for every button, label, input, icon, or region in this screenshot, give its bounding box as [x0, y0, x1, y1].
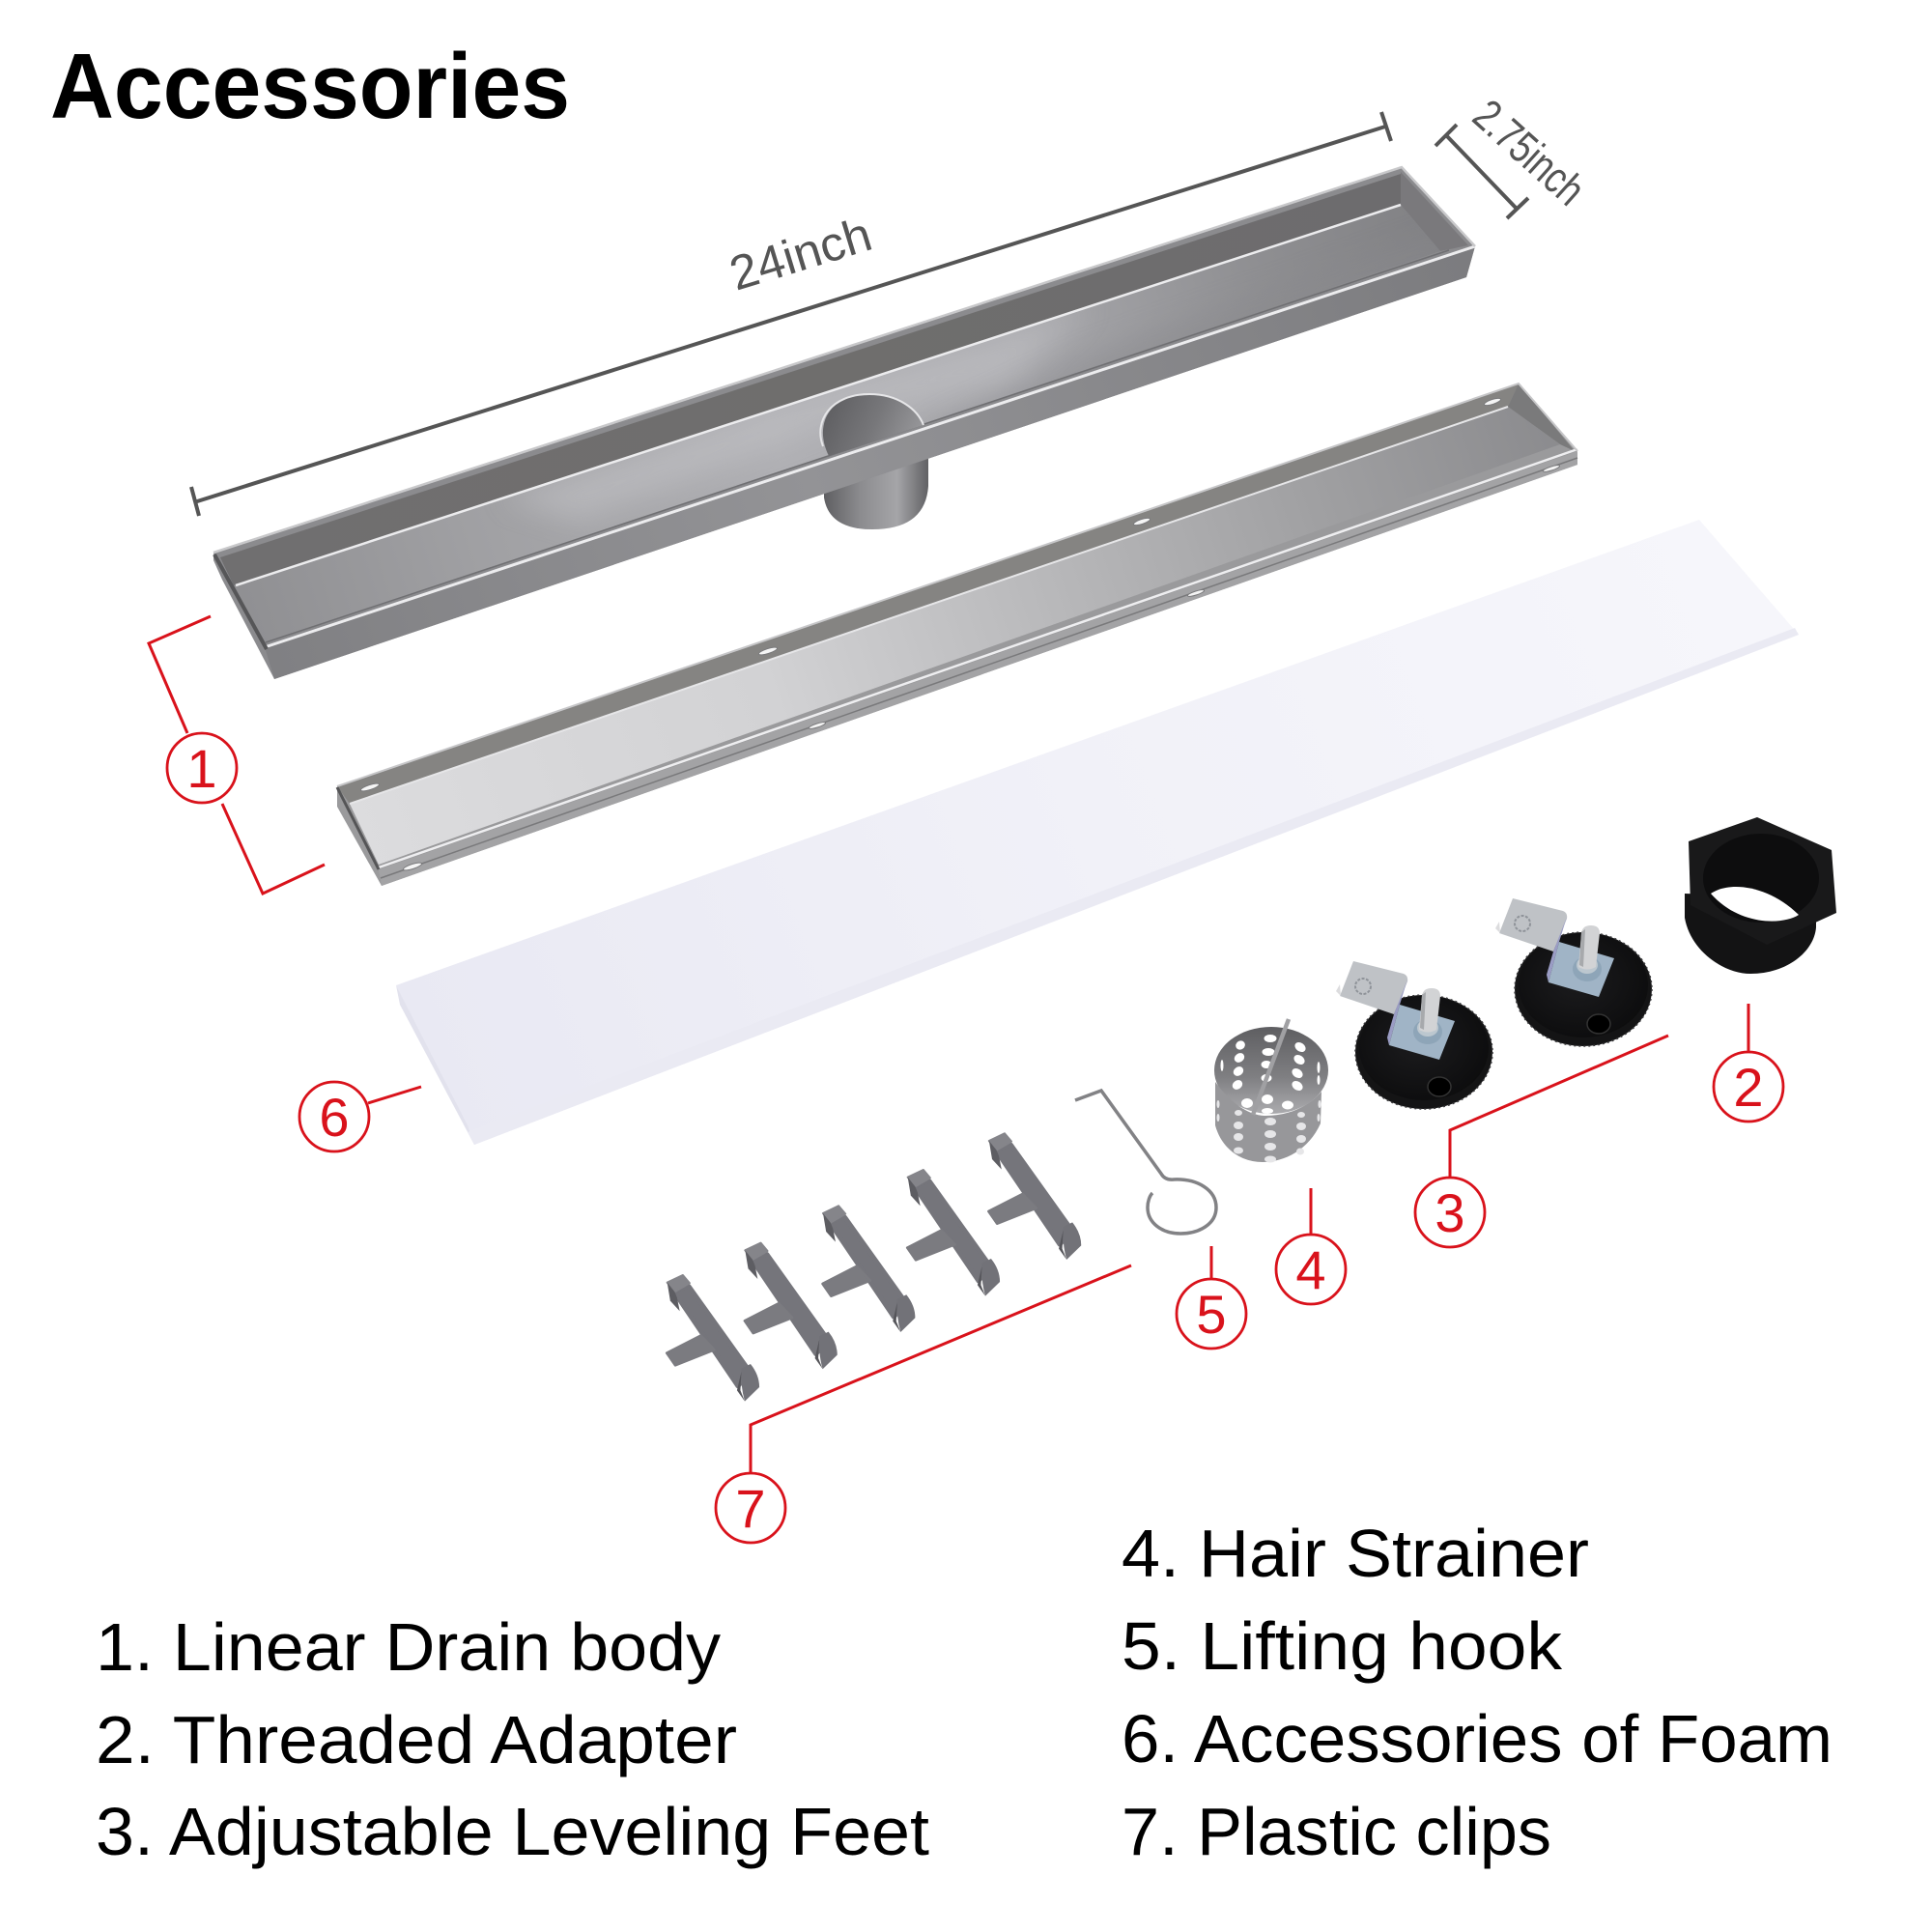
callout 1: 1: [186, 738, 217, 799]
floor light and shadow: [531, 323, 1168, 518]
callout 3: 3: [1435, 1182, 1465, 1243]
linear drain body: cover tray: [337, 384, 1577, 886]
dimension: 2.75inch width: [1435, 90, 1595, 218]
callout 4: 4: [1295, 1239, 1326, 1300]
dimension: 24inch length: [191, 112, 1391, 516]
parts list, left column: [96, 1609, 929, 1869]
parts list, right column: 7. Plastic clips: [1122, 1794, 1551, 1869]
adjustable leveling foot, rear: [1495, 898, 1652, 1046]
adjustable leveling foot, front: [1336, 961, 1492, 1109]
plastic clips: [667, 1133, 1081, 1402]
linear drain body: channel with outlet pipe: [213, 167, 1475, 679]
threaded adapter: [1685, 817, 1836, 974]
dimension: 24inch length: 24inch: [724, 207, 878, 301]
outlet pipe, lower section: [824, 440, 928, 529]
clip 3: [823, 1206, 915, 1332]
parts list, left column: 3. Adjustable Leveling Feet: [96, 1794, 929, 1869]
parts list, right column: [1122, 1516, 1833, 1869]
callout 3: [1415, 1036, 1668, 1247]
parts list, left column: 1. Linear Drain body: [96, 1609, 721, 1685]
clip 5: [988, 1133, 1081, 1260]
callout 6: [299, 1082, 421, 1151]
parts list, right column: 6. Accessories of Foam: [1122, 1701, 1833, 1776]
title: Accessories: [50, 35, 570, 138]
callout 7: [716, 1265, 1131, 1543]
clip 2: [745, 1243, 838, 1369]
parts list, right column: 5. Lifting hook: [1122, 1608, 1563, 1684]
callout 7: 7: [735, 1478, 766, 1539]
callout 5: [1177, 1246, 1246, 1349]
hair strainer: [1214, 1019, 1328, 1163]
parts list, left column: 2. Threaded Adapter: [96, 1702, 737, 1777]
callout 2: 2: [1733, 1057, 1764, 1118]
foam strip: [396, 520, 1799, 1145]
dimension: 2.75inch width: 2.75inch: [1463, 90, 1595, 214]
callout 1: [149, 616, 325, 894]
lifting hook: [1075, 1091, 1216, 1234]
clip 4: [907, 1170, 1000, 1296]
callout 4: [1276, 1188, 1346, 1304]
callout 6: 6: [319, 1087, 350, 1148]
callout 2: [1714, 1004, 1783, 1122]
parts list, right column: 4. Hair Strainer: [1122, 1516, 1589, 1591]
mounting slots: [360, 397, 1560, 871]
clip 1: [667, 1275, 759, 1402]
outlet pipe opening: [820, 394, 923, 456]
callout 5: 5: [1196, 1284, 1227, 1345]
